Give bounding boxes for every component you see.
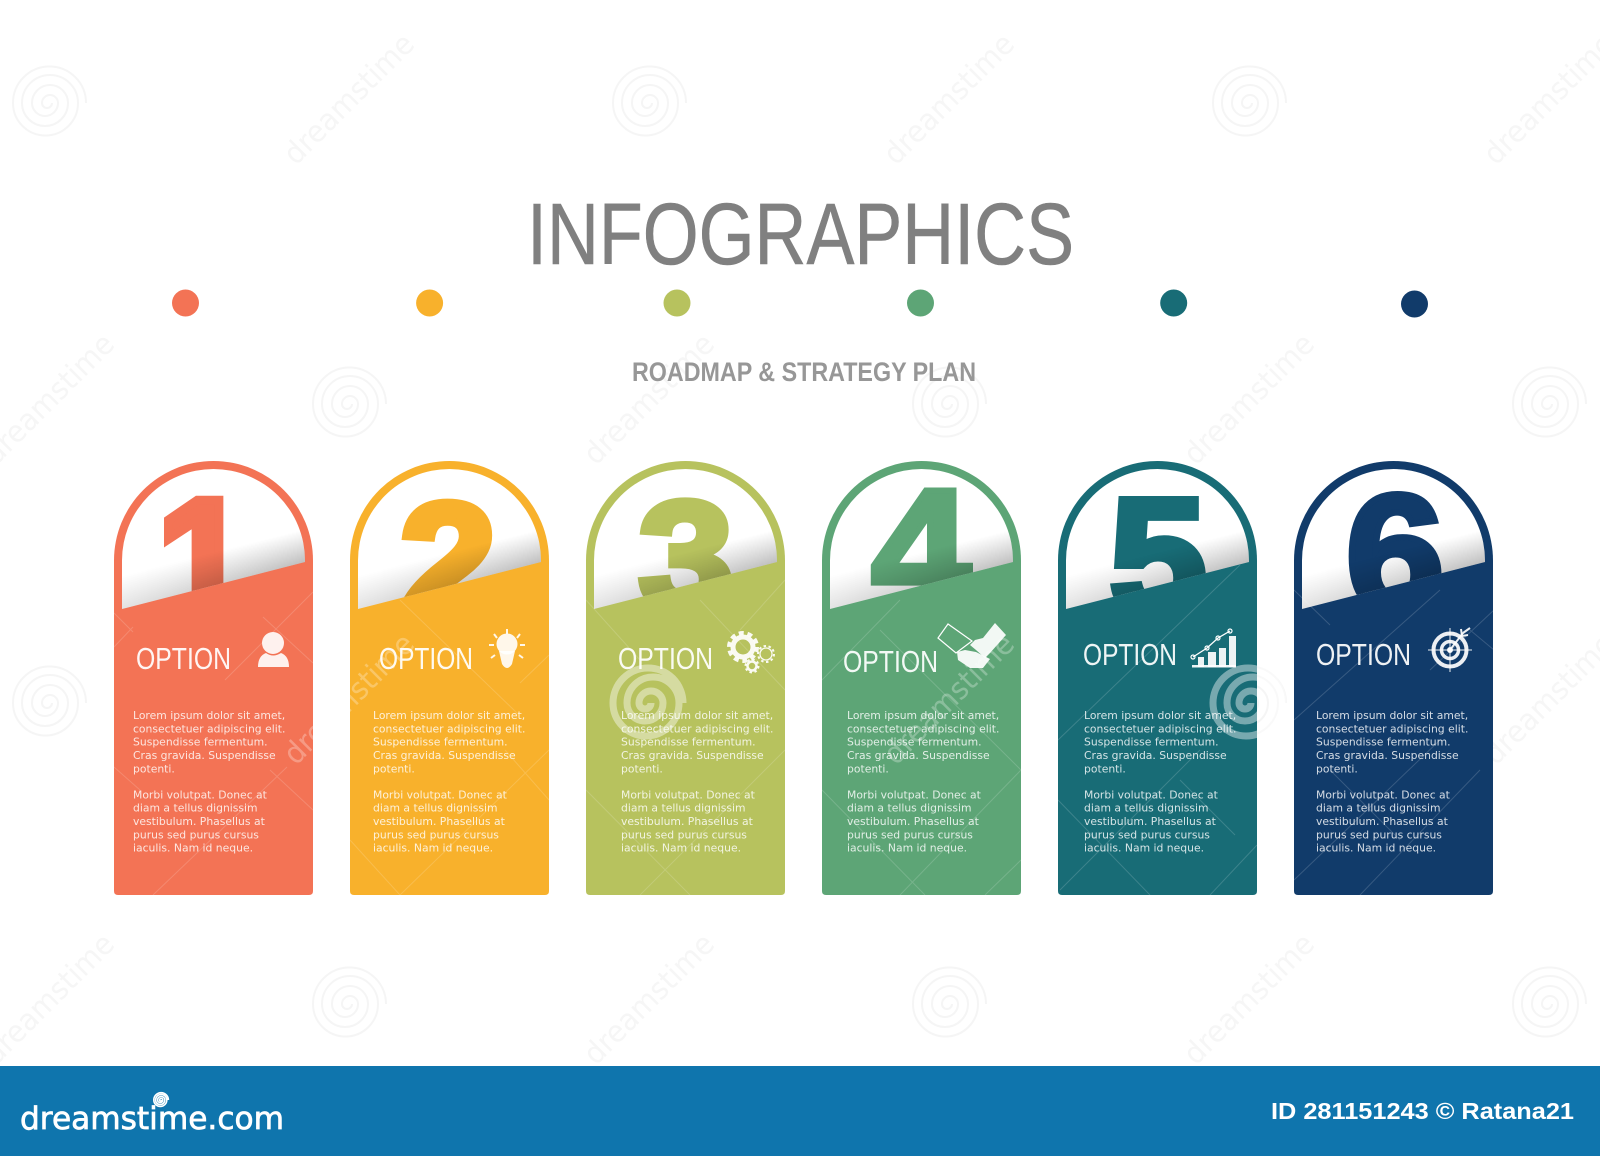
text: dreamstime [577,927,722,1072]
option 6 text: Cras gravida. Suspendisse [1316,749,1459,762]
option 3 label: OPTION [618,641,713,676]
option 3 text: vestibulum. Phasellus at [621,815,753,828]
option 5 text: Cras gravida. Suspendisse [1084,749,1227,762]
text: dreamstime [877,27,1022,172]
option 2 text: potenti. [373,762,415,775]
option 4 text: Lorem ipsum dolor sit amet, [847,709,999,722]
option 3 text [621,709,773,855]
icon: handshake [938,623,1006,668]
card 2 shape with number [350,461,549,895]
option 5 text: iaculis. Nam id neque. [1084,842,1204,855]
icon: target [1428,628,1472,672]
option 4 text: vestibulum. Phasellus at [847,815,979,828]
option 2 text: diam a tellus dignissim [373,802,498,815]
option 6 text: consectetuer adipiscing elit. [1316,722,1468,735]
option 3 text: consectetuer adipiscing elit. [621,722,773,735]
option 1 text: Lorem ipsum dolor sit amet, [133,709,285,722]
option 2 text: consectetuer adipiscing elit. [373,722,525,735]
title: INFOGRAPHICS [527,186,1074,283]
option 1 text: potenti. [133,762,175,775]
text: dreamstime [1177,327,1322,472]
option 5 text: potenti. [1084,762,1126,775]
option 1 text: Morbi volutpat. Donec at [133,788,267,801]
option 6 text: potenti. [1316,762,1358,775]
option 3 text: purus sed purus cursus [621,828,747,841]
option 3 text: Morbi volutpat. Donec at [621,788,755,801]
panel: option 5 [1058,461,1257,895]
panel: option 1 [114,461,313,895]
option 4 text: Cras gravida. Suspendisse [847,749,990,762]
option 1 text: purus sed purus cursus [133,828,259,841]
card 4 shape with number [822,453,1021,895]
option 2 text: Lorem ipsum dolor sit amet, [373,709,525,722]
option 6 label: OPTION [1316,637,1411,672]
option 5 text: diam a tellus dignissim [1084,802,1209,815]
option 2 text: purus sed purus cursus [373,828,499,841]
option 4 text: purus sed purus cursus [847,828,973,841]
card 2 shape with number: 2 [400,469,496,656]
option 4 text: iaculis. Nam id neque. [847,842,967,855]
option 3 text: diam a tellus dignissim [621,802,746,815]
text: dreamstime [577,327,722,472]
option 5 text: purus sed purus cursus [1084,828,1210,841]
option 5 label: OPTION [1083,637,1177,672]
option 3 text: Cras gravida. Suspendisse [621,749,764,762]
card 6 shape with number: 6 [1345,459,1445,648]
option 1 text: Suspendisse fermentum. [133,736,268,749]
card 3 shape with number [586,461,785,895]
footer logo: dreamstime.com [20,1101,284,1137]
option 4 label: OPTION [843,644,938,679]
text: dreamstime [277,27,422,172]
option 5 text: Lorem ipsum dolor sit amet, [1084,709,1236,722]
card 5 shape with number [1058,461,1257,895]
card 5 shape with number: 5 [1109,464,1207,652]
option 6 text: Morbi volutpat. Donec at [1316,788,1450,801]
option 6 text: Suspendisse fermentum. [1316,736,1451,749]
option 3 text: potenti. [621,762,663,775]
option 1 text [133,709,285,855]
icon: gears [729,633,774,672]
option 4 text: diam a tellus dignissim [847,802,972,815]
text: dreamstime [277,627,422,772]
option 1 text: iaculis. Nam id neque. [133,842,253,855]
option 6 text: vestibulum. Phasellus at [1316,815,1448,828]
card 6 shape with number [1294,459,1493,895]
option 1 text: diam a tellus dignissim [133,802,258,815]
icon: light bulb [489,629,525,668]
option 2 text [373,709,525,855]
text: dreamstime [877,627,1022,772]
option 1 text: Cras gravida. Suspendisse [133,749,276,762]
panel: option 2 [350,461,549,895]
option 1 text: vestibulum. Phasellus at [133,815,265,828]
panel: option 3 [586,461,785,895]
option 4 text: consectetuer adipiscing elit. [847,722,999,735]
colour dots row [172,290,1428,318]
option 5 text: Suspendisse fermentum. [1084,736,1219,749]
option 2 text: Morbi volutpat. Donec at [373,788,507,801]
option 4 text: potenti. [847,762,889,775]
card 3 shape with number: 3 [639,469,733,643]
option 2 text: iaculis. Nam id neque. [373,842,493,855]
option 6 text [1316,709,1468,855]
option 2 text: vestibulum. Phasellus at [373,815,505,828]
option 5 text: consectetuer adipiscing elit. [1084,722,1236,735]
option 4 text: Morbi volutpat. Donec at [847,788,981,801]
panel: option 6 [1294,459,1493,895]
option 3 text: Suspendisse fermentum. [621,736,756,749]
option 4 text [847,709,999,855]
icon: person [258,632,289,667]
card 4 shape with number: 4 [871,453,971,642]
panel: option 4 [822,453,1021,895]
footer bar [0,1066,1600,1156]
option 6 text: iaculis. Nam id neque. [1316,842,1436,855]
option 5 text [1084,709,1236,855]
option 2 label: OPTION [379,641,473,676]
option 5 text: vestibulum. Phasellus at [1084,815,1216,828]
text: dreamstime [1177,927,1322,1072]
footer credit: ID 281151243 © Ratana21 [1271,1098,1574,1124]
card 1 shape with number [114,461,313,895]
option 1 label: OPTION [136,641,231,676]
option 1 text: consectetuer adipiscing elit. [133,722,285,735]
option 4 text: Suspendisse fermentum. [847,736,982,749]
option 5 text: Morbi volutpat. Donec at [1084,788,1218,801]
option 6 text: purus sed purus cursus [1316,828,1442,841]
option 6 text: Lorem ipsum dolor sit amet, [1316,709,1468,722]
option 3 text: iaculis. Nam id neque. [621,842,741,855]
option 6 text: diam a tellus dignissim [1316,802,1441,815]
icon: growth chart [1191,629,1236,668]
subtitle: ROADMAP & STRATEGY PLAN [632,357,976,387]
option 2 text: Cras gravida. Suspendisse [373,749,516,762]
option 2 text: Suspendisse fermentum. [373,736,508,749]
option 3 text: Lorem ipsum dolor sit amet, [621,709,773,722]
card 1 shape with number: 1 [157,462,250,660]
